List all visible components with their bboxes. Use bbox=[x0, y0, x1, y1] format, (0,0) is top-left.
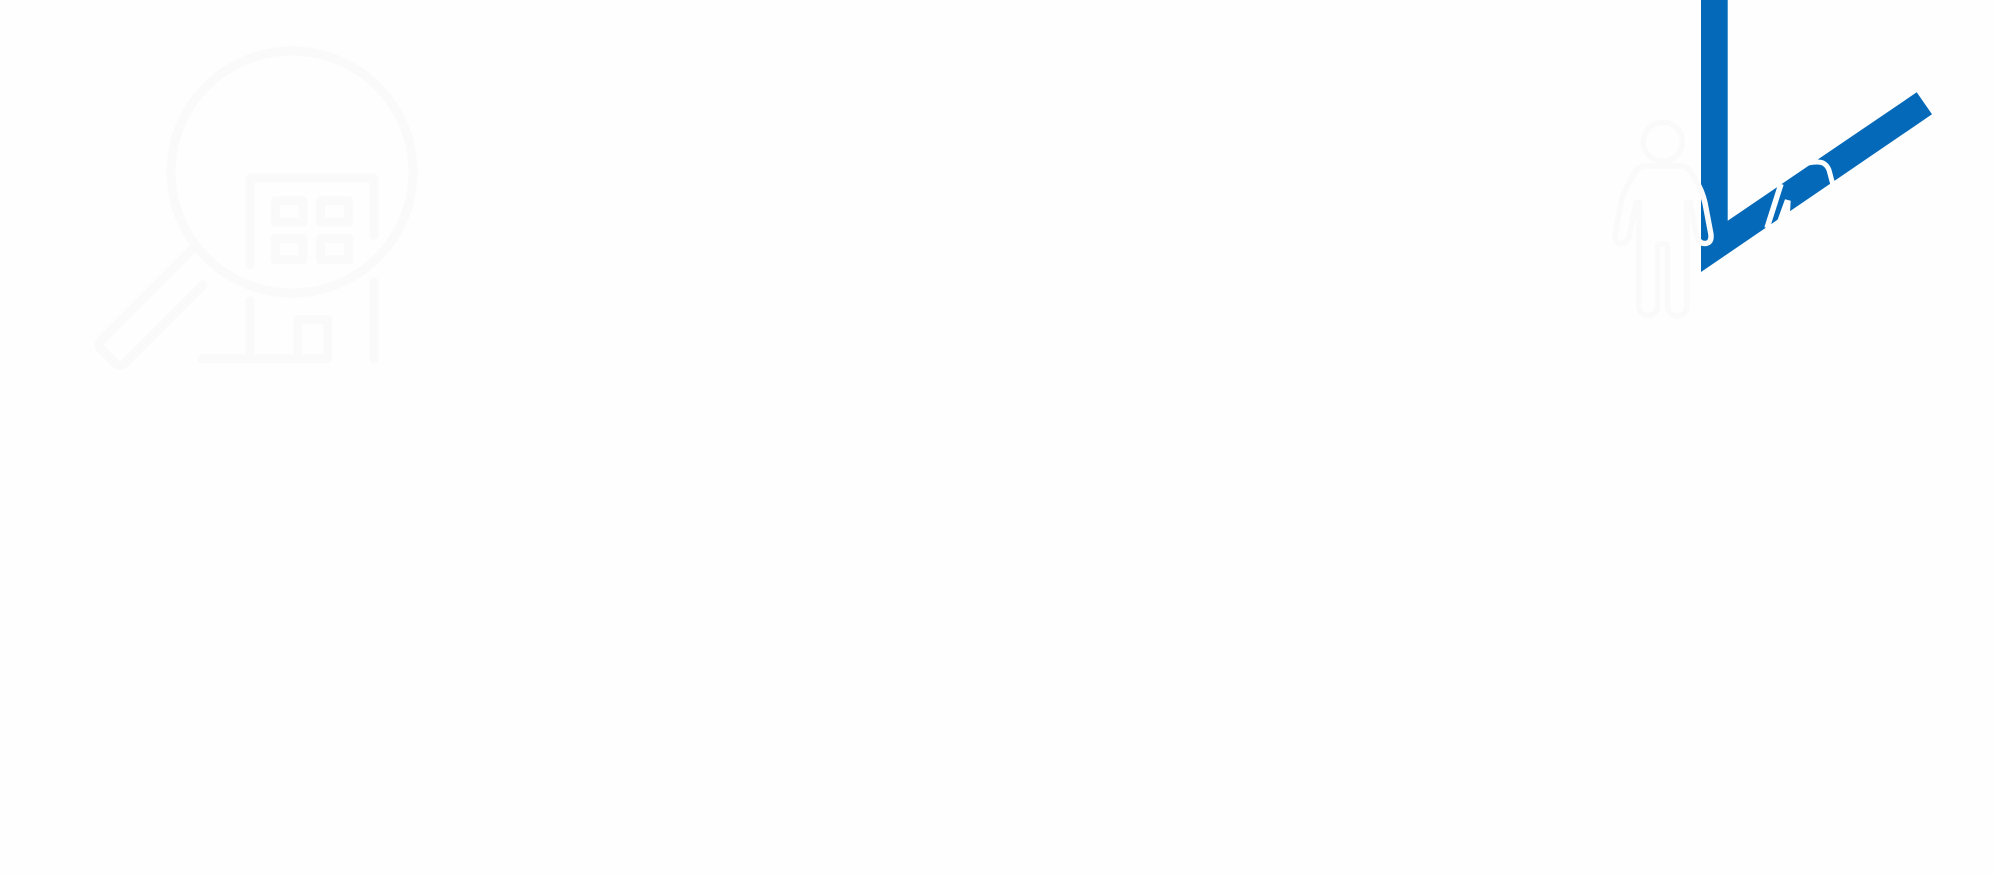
building window top left bbox=[275, 201, 303, 222]
building upper outline bbox=[250, 178, 374, 265]
person arms and shoulders bbox=[1615, 166, 1711, 244]
blue check mark bbox=[1701, 0, 1932, 272]
building window top right bbox=[320, 201, 349, 222]
building right wall bbox=[370, 282, 378, 359]
person legs and torso bbox=[1639, 200, 1687, 316]
building lower wall and door bbox=[202, 301, 328, 359]
person head bbox=[1643, 122, 1682, 161]
arm outline lower bbox=[1767, 184, 1781, 228]
arm notch bbox=[1776, 199, 1791, 224]
icon: person outline bbox=[1615, 122, 1711, 316]
building window bottom right bbox=[320, 238, 349, 260]
magnifier lens bbox=[171, 51, 413, 293]
icon: magnifying glass over building bbox=[99, 51, 413, 365]
magnifier handle bbox=[99, 249, 203, 365]
white hand cut-out on check mark bbox=[1767, 162, 1833, 228]
building window bottom left bbox=[275, 238, 303, 260]
arm outline upper bbox=[1808, 162, 1833, 185]
